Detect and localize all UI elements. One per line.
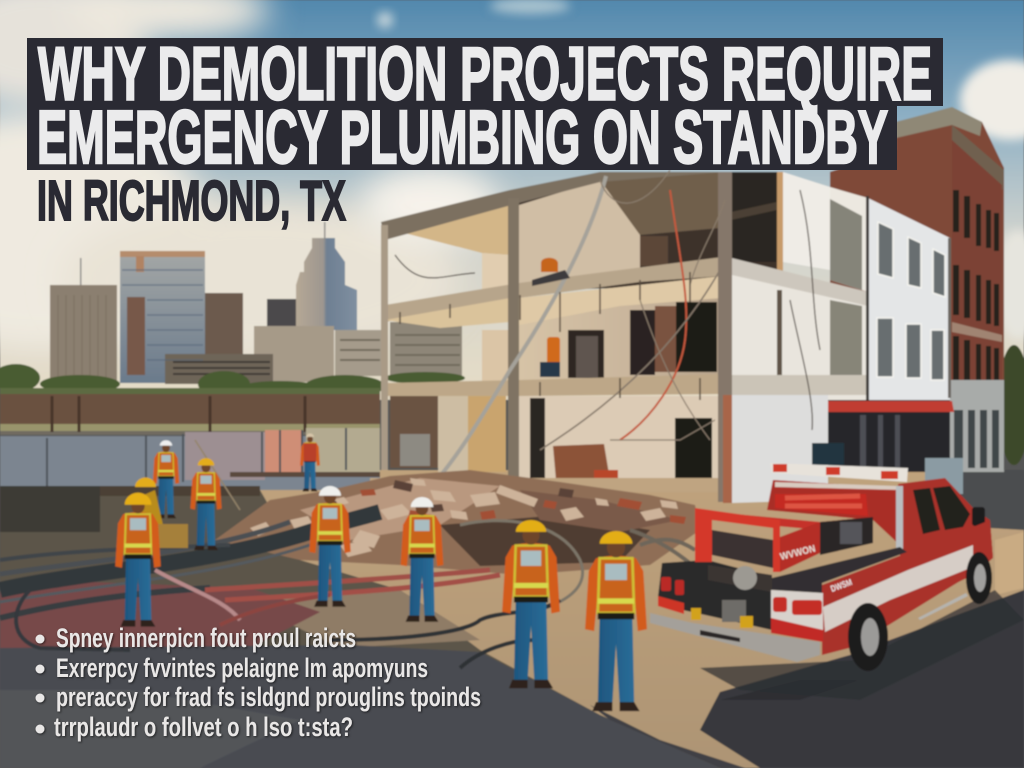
- hoses: [0, 440, 695, 668]
- worker: background yellow helmet: [190, 458, 222, 550]
- rubble pile: [215, 470, 700, 575]
- side label: DWSM: [829, 577, 853, 594]
- worker: front left: [115, 493, 161, 627]
- bullet list: [36, 623, 481, 742]
- worker: white helmet centre left: [309, 486, 351, 607]
- subtitle: IN RICHMOND, TX: [37, 169, 346, 233]
- white side walls: [732, 262, 868, 400]
- trees: [0, 345, 1024, 465]
- slab one: [385, 257, 722, 322]
- demolished building: [370, 172, 963, 503]
- black equipment cage: [820, 517, 873, 555]
- ground: [0, 470, 1024, 768]
- silhouettes of figures in the upper floors: [532, 258, 570, 377]
- title banner: [27, 32, 943, 179]
- fence and site hoarding: [0, 394, 380, 532]
- side body: [822, 520, 993, 655]
- middle floor: [519, 276, 722, 395]
- worker: yellow helmet right: [502, 520, 560, 688]
- rear right corner and lights: [771, 590, 823, 642]
- left cantilever: [385, 195, 510, 255]
- bullet one: Spney innerpicn fout proul raicts: [56, 623, 356, 653]
- slab two: [385, 374, 722, 396]
- worker: crouching: [135, 478, 188, 548]
- title line two bar: [27, 104, 897, 170]
- tool box with label: WVWON: [779, 544, 817, 563]
- worker: background white helmet: [153, 440, 179, 518]
- bullet two: [36, 653, 428, 683]
- tool box with label: [779, 522, 820, 572]
- title line one bar: [27, 38, 943, 106]
- ground floor: [390, 396, 438, 468]
- rear wheel: [848, 603, 888, 671]
- bullet four: trrplaudr o follvet o h lso t:sta?: [54, 712, 353, 742]
- bullet three: preraccy for frad fs isldgnd prouglins tpoinds: [56, 682, 481, 712]
- rear of truck: [658, 560, 772, 630]
- bed back panel and equipment: [767, 480, 903, 548]
- cab: [898, 478, 993, 610]
- dangling wires and pipes: [395, 170, 820, 498]
- bullet one: [36, 623, 356, 653]
- light bar: [770, 463, 908, 482]
- bullet two: Exrerpcy fvvintes pelaigne lm apomyuns: [56, 653, 428, 683]
- sky: [0, 0, 1024, 400]
- worker: white helmet centre: [401, 497, 443, 622]
- red emergency plumbing truck: [650, 463, 1024, 700]
- posts: [381, 225, 388, 470]
- top floor interior: [515, 172, 782, 290]
- truck shadow: [700, 590, 1024, 700]
- city skyline: [50, 222, 462, 385]
- bed rail: [772, 547, 907, 593]
- worker: background red shirt: [300, 433, 320, 491]
- brick building: [830, 107, 1004, 472]
- front wheel: [966, 552, 992, 604]
- worker: yellow helmet far right: [585, 531, 647, 711]
- red rack frame: [695, 508, 780, 572]
- bumper: [650, 613, 820, 662]
